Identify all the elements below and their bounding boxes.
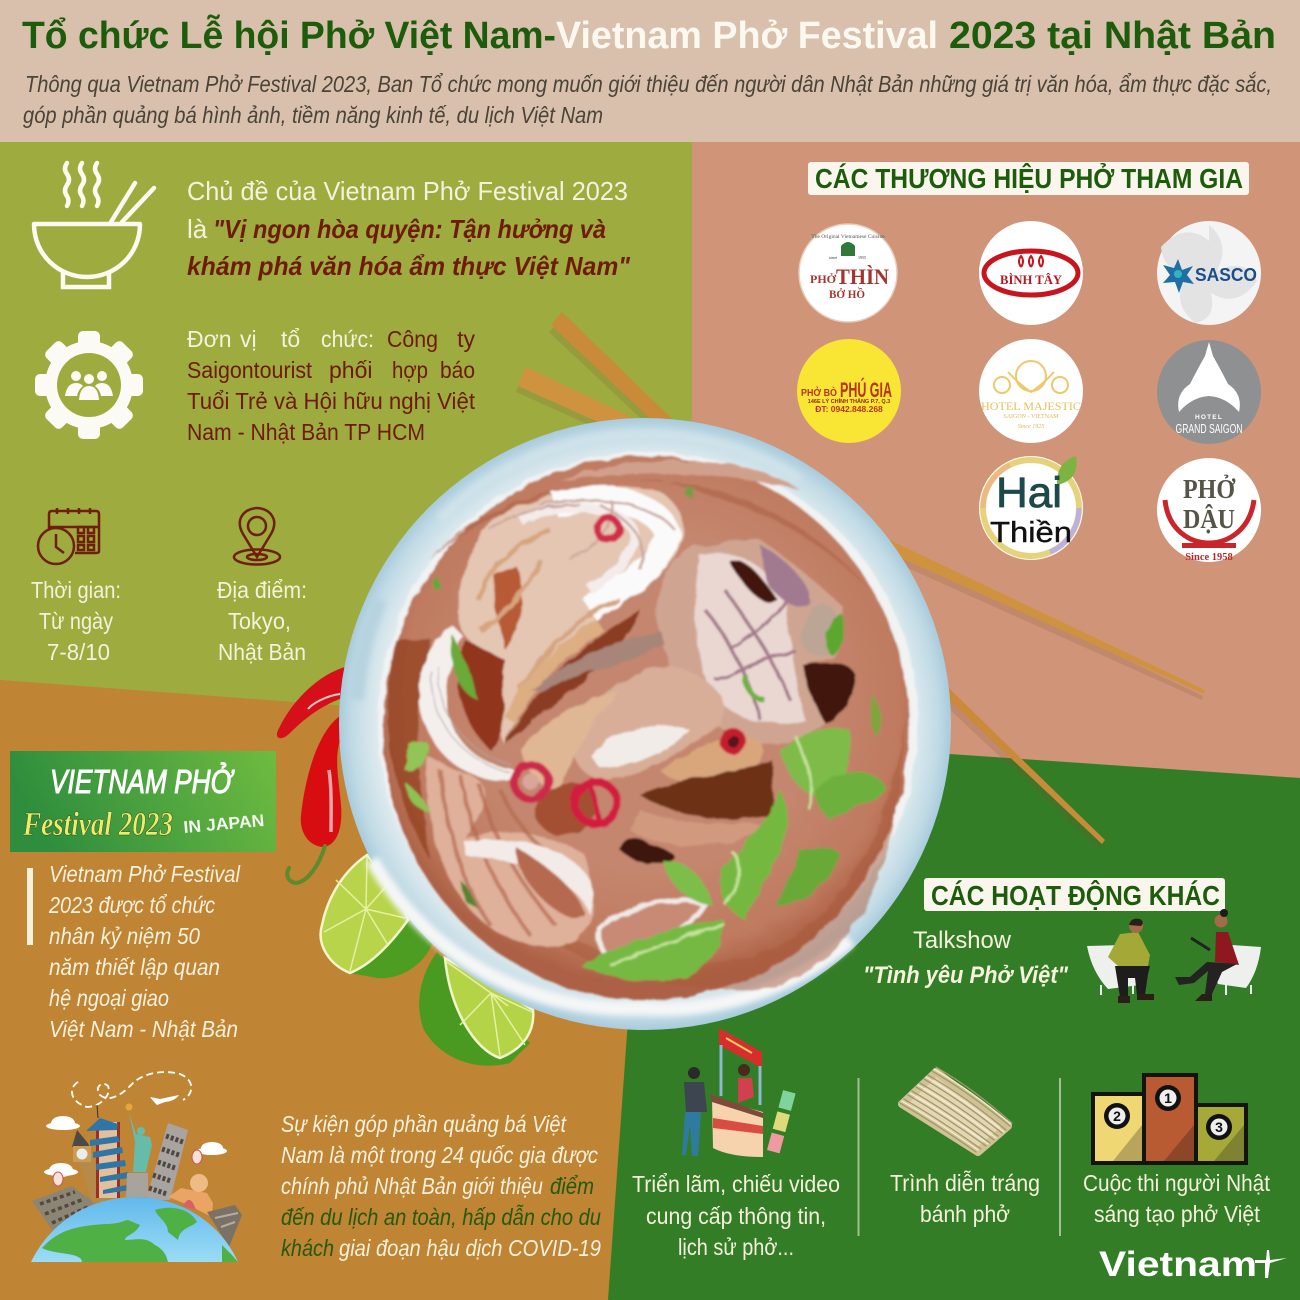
event description text: Sự kiện góp phần quảng bá Việt [281, 1111, 567, 1137]
activity: contest text: sáng tạo phở Việt [1094, 1201, 1261, 1227]
logo: Hotel Grand Saigon: HOTEL [1195, 414, 1223, 421]
icon: winners podium: 1 [1164, 1090, 1172, 1106]
icon: winners podium: 3 [1215, 1119, 1223, 1135]
lime slices [321, 855, 533, 1066]
logo: Hai Thiền [979, 456, 1083, 560]
panel: pink brands section [692, 142, 1300, 778]
icon: winners podium [1093, 1075, 1246, 1163]
logo: Phở Thìn Bờ Hồ: PHỞ [810, 272, 837, 286]
Leaning tower [146, 1123, 188, 1200]
icon: gear with people [35, 331, 143, 439]
logo: Hotel Majestic: Since 1925 [1018, 424, 1044, 430]
logo: Hotel Grand Saigon [1157, 340, 1261, 444]
festival logo banner: VIETNAM PHỞ [50, 762, 235, 800]
organizer text: vị [240, 326, 257, 352]
time text: Thời gian: [31, 577, 121, 603]
organizer text: Saigontourist [187, 357, 313, 383]
subtitle: góp phần quảng bá hình ảnh, tiềm năng kinh tế, du lịch Việt Nam [23, 102, 603, 128]
talkshow text: "Tình yêu Phở Việt" [863, 962, 1069, 989]
theme text: là [187, 214, 208, 244]
activity: exhibition text [632, 1171, 840, 1260]
organizer text: ty [457, 326, 475, 352]
organizer text: Đơn [187, 326, 231, 352]
logo: Phở Thìn Bờ Hồ: BỞ HỒ [829, 286, 865, 301]
title: Vietnam Phở Festival [556, 15, 938, 57]
flight path and plane [72, 1072, 191, 1107]
activity: exhibition text: Triển lãm, chiếu video [632, 1171, 840, 1197]
logo: Phở Bò Phú Gia: PHÚ GIA [840, 378, 892, 402]
lower meat and dark broth [660, 737, 762, 785]
logo: Phở Bò Phú Gia: PHỞ BÒ [801, 386, 837, 399]
organizer text [187, 326, 476, 445]
anniversary text: 2023 được tổ chức [48, 892, 215, 918]
anniversary text: năm thiết lập quan [49, 954, 220, 980]
logo: Hai Thiền: Hai [996, 469, 1062, 517]
activity: exhibition text: cung cấp thông tin, [646, 1203, 826, 1229]
logo: Phở Thìn Bờ Hồ: The Original Vietnamese Cuisine [811, 234, 885, 240]
noodles lower left [419, 625, 518, 781]
icon: talkshow people [1087, 909, 1261, 1003]
event description text: đến du lịch an toàn, hấp dẫn cho du [281, 1203, 601, 1230]
logo: Phở Thìn Bờ Hồ: THÌN [836, 264, 889, 289]
location text: Tokyo, [228, 608, 291, 634]
activity: noodle demo text [890, 1170, 1040, 1227]
logo: Bình Tây [979, 221, 1083, 325]
brand: Vietnam+ logo: Vietnam [1099, 1245, 1257, 1284]
logo: Phở Thìn Bờ Hồ: 1955 [858, 255, 866, 260]
pagoda [86, 1105, 131, 1198]
event description text: điểm [550, 1173, 594, 1199]
festival logo banner [10, 751, 276, 852]
icon: winners podium: 2 [1113, 1108, 1121, 1124]
logo: Phở Dậu [1157, 458, 1261, 563]
logo: Phở Dậu: DẬU [1183, 504, 1235, 534]
logo: Hotel Grand Saigon: GRAND SAIGON [1176, 421, 1242, 436]
illustration: world landmarks on globe [31, 1072, 242, 1262]
anniversary text: Vietnam Phở Festival [49, 861, 241, 887]
Taj Mahal [168, 1188, 213, 1217]
globe [31, 1197, 238, 1262]
theme text [187, 176, 631, 281]
event description text: khách [281, 1235, 334, 1261]
logo: Phở Dậu: PHỞ [1183, 474, 1236, 504]
talkshow text: Talkshow [913, 927, 1012, 954]
festival logo banner: IN JAPAN [183, 811, 265, 837]
panel: ochre history section [0, 680, 640, 1300]
organizer text: Tuổi Trẻ và Hội hữu nghị Việt [187, 388, 476, 414]
location text [217, 577, 307, 665]
balloons [53, 1172, 63, 1186]
logo: Phở Dậu: Since 1958 [1185, 552, 1233, 563]
organizer text: báo [440, 357, 475, 383]
logo: Phở Thìn Bờ Hồ: since [829, 255, 837, 260]
broth and soup contents [378, 452, 918, 1000]
logo: Hotel Majestic [979, 339, 1083, 443]
logo: Hotel Majestic: HOTEL MAJESTIC [981, 401, 1081, 413]
logo: Phở Thìn Bờ Hồ [799, 224, 897, 322]
talkshow text [863, 927, 1069, 989]
anniversary text: nhân kỷ niệm 50 [49, 923, 200, 949]
rim highlights [357, 435, 850, 1009]
logo: Phở Bò Phú Gia: ĐT: 0942.848.268 [815, 404, 883, 414]
clouds [44, 1116, 227, 1177]
festival logo banner: Festival 2023 [22, 806, 173, 843]
logo: Bình Tây: BÌNH TÂY [1000, 272, 1063, 287]
anniversary text: hệ ngoại giao [49, 985, 169, 1011]
location text: Nhật Bản [218, 639, 306, 665]
logo: SASCO: SASCO [1195, 265, 1257, 285]
anniversary text: Việt Nam - Nhật Bản [49, 1016, 238, 1042]
Big Ben [74, 1147, 106, 1202]
chopsticks [516, 312, 1205, 850]
subtitle [23, 71, 1272, 128]
activity: noodle demo text: Trình diễn tráng [890, 1170, 1040, 1196]
anniversary text [48, 861, 241, 1042]
beef slices [656, 539, 842, 744]
quote bar [27, 868, 33, 945]
event description text [281, 1111, 601, 1261]
icon: noodle bundle [900, 1067, 1012, 1152]
Colosseum [32, 1186, 95, 1230]
activity: contest text [1083, 1170, 1271, 1227]
activity: noodle demo text: bánh phở [920, 1201, 1010, 1227]
activities heading: CÁC HOẠT ĐỘNG KHÁC [931, 879, 1220, 911]
panel: olive theme section [0, 142, 692, 706]
organizer text: Công [387, 326, 438, 352]
panel: header background [0, 0, 1300, 142]
activity: contest text: Cuộc thi người Nhật [1083, 1170, 1271, 1196]
title: 2023 tại Nhật Bản [949, 15, 1276, 57]
activity: exhibition text: lịch sử phở... [678, 1234, 794, 1260]
icon: bowl with chopsticks [34, 163, 154, 287]
chili peppers [277, 667, 345, 883]
logo: Hotel Majestic: SAIGON - VIETNAM [1003, 414, 1059, 420]
illustration: bowl of pho [339, 418, 951, 1030]
organizer text: tổ [281, 326, 300, 352]
herbs [451, 635, 478, 700]
panel: green activities section [608, 754, 1300, 1300]
time text: 7-8/10 [47, 639, 110, 665]
event description text: giai đoạn hậu dịch COVID-19 [339, 1235, 601, 1261]
icon: location pin [234, 508, 280, 564]
noodles top [459, 487, 683, 745]
organizer text: hợp [392, 357, 428, 383]
title: Tổ chức Lễ hội Phở Việt Nam- [22, 13, 556, 57]
event description text: Nam là một trong 24 quốc gia được [281, 1142, 598, 1168]
logo: Hai Thiền: Thiền [990, 517, 1072, 549]
brands heading: CÁC THƯƠNG HIỆU PHỞ THAM GIA [815, 162, 1243, 194]
logo: SASCO [1157, 221, 1261, 325]
logo: Phở Bò Phú Gia [797, 339, 901, 443]
organizer text: chức: [321, 326, 374, 352]
event description text: chính phủ Nhật Bản giới thiệu [281, 1173, 543, 1199]
logo: Phở Bò Phú Gia: 146E LÝ CHÍNH THẮNG P.7, Q.3 [808, 397, 890, 405]
title [22, 13, 1276, 57]
theme text: Chủ đề của Vietnam Phở Festival 2023 [187, 176, 628, 206]
theme text: khám phá văn hóa ẩm thực Việt Nam" [187, 251, 631, 281]
theme text: "Vị ngon hòa quyện: Tận hưởng và [213, 214, 606, 244]
Statue of Liberty [129, 1112, 152, 1172]
organizer text: Nam - Nhật Bản TP HCM [187, 419, 425, 445]
icon: exhibition booth [682, 1028, 796, 1157]
time text [31, 577, 121, 665]
location text: Địa điểm: [217, 577, 307, 603]
icon: calendar and clock [38, 508, 99, 564]
time text: Từ ngày [39, 608, 113, 634]
pyramid [207, 1205, 242, 1247]
organizer text: phối [329, 357, 372, 383]
bowl rim [339, 418, 951, 1030]
